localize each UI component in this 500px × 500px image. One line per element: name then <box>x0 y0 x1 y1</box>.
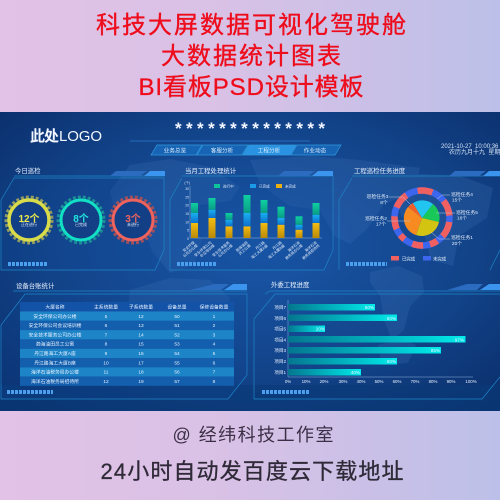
data table: 2 <box>213 323 216 329</box>
category labels: 员工公寓 <box>237 243 252 256</box>
legend <box>214 184 296 188</box>
data table: 10 <box>103 360 109 366</box>
pie callouts: 巡检任务1 <box>451 234 473 241</box>
panel: inspection task progress <box>339 166 500 270</box>
nav tabs <box>151 145 341 155</box>
logo <box>30 127 102 145</box>
gauge: in progress <box>6 197 52 243</box>
category labels: 税务局办公楼 <box>284 243 304 261</box>
download note: 24小时自动发百度云下载地址 <box>100 459 404 484</box>
horizontal bar chart: 60% <box>387 316 396 321</box>
horizontal bar chart: 97% <box>455 337 464 342</box>
stacked bar chart: 30 <box>185 187 189 191</box>
data table: 56 <box>174 370 180 376</box>
donut ring <box>394 190 450 246</box>
category labels: 海洋石油 <box>286 240 301 253</box>
data table: 51 <box>174 323 180 329</box>
world map <box>110 156 493 365</box>
stacked bar chart: 0 <box>187 237 189 241</box>
data table: 主系统数量 <box>94 304 118 310</box>
pie chart <box>404 200 440 236</box>
donut legend <box>391 256 447 262</box>
gauge: not started: 3个 <box>125 213 141 225</box>
horizontal bar chart: 项目7 <box>274 305 286 311</box>
data table: 55 <box>174 360 180 366</box>
horizontal bar chart: 50% <box>375 379 383 384</box>
pie callouts: 巡检任务4 <box>451 191 473 198</box>
studio credit: @ 经纬科技工作室 <box>172 425 334 445</box>
horizontal bar chart: 项目3 <box>274 348 286 354</box>
logo: 此处 <box>30 127 59 145</box>
dashboard panel <box>0 112 500 411</box>
data table: 16 <box>138 351 144 357</box>
data table: 保修设备数量 <box>200 304 229 310</box>
data table: 丹江路海工大厦A座 <box>34 350 76 357</box>
category labels: 安全环保 <box>181 240 196 253</box>
category labels: 海工大厦B座 <box>267 243 286 260</box>
data table: 设备总量 <box>167 304 187 310</box>
data table: 12 <box>138 314 144 320</box>
nav tabs: 客服分析 <box>211 146 234 154</box>
data table: 17 <box>138 360 144 366</box>
stacked bar chart: 15 <box>185 212 189 216</box>
horizontal bar chart: 60% <box>393 379 401 384</box>
pie callouts: 巡检任务2 <box>365 215 387 222</box>
gauge: not started: 未进行 <box>127 221 139 227</box>
stacked bar chart: 5 <box>187 229 189 233</box>
data table: 海洋石油税务局招待所 <box>31 378 79 385</box>
data table: 4 <box>213 342 216 348</box>
data table: 渤海油田员工公寓 <box>36 341 74 348</box>
horizontal bar chart: 10% <box>302 379 310 384</box>
pie callouts: 15个 <box>452 198 462 204</box>
data table: 7 <box>213 370 216 376</box>
header rule <box>130 140 310 142</box>
horizontal bar chart: 50% <box>365 305 374 310</box>
donut legend: 已完成 <box>402 256 416 262</box>
data table: 6 <box>105 323 108 329</box>
horizontal bar chart: 85% <box>431 348 440 353</box>
date and time: 2021-10-27 10:00:36 <box>441 144 499 150</box>
horizontal bar chart: 60% <box>387 359 396 364</box>
data table: 50 <box>174 314 180 320</box>
data table: 13 <box>138 323 144 329</box>
horizontal bar chart: 70% <box>411 379 419 384</box>
data table: 9 <box>105 351 108 357</box>
data table: 8 <box>105 342 108 348</box>
horizontal bar chart: 项目2 <box>274 359 286 365</box>
title: 大数据统计图表 <box>161 43 341 70</box>
legend: 进行中 <box>223 184 234 188</box>
data table: 安全环保公司会议培训楼 <box>29 322 82 329</box>
horizontal bar chart: 项目6 <box>274 316 286 322</box>
data table: 安全环保公司办公楼 <box>33 313 77 320</box>
stacked bar chart: 25 <box>185 195 189 199</box>
category labels: 丹江路 <box>271 240 283 251</box>
title: BI看板PSD设计模板 <box>138 74 364 101</box>
donut legend: 未完成 <box>433 256 447 262</box>
horizontal bar chart: 40% <box>357 379 365 384</box>
data table: 12 <box>103 379 109 385</box>
data table: 5 <box>213 351 216 357</box>
data table: 7 <box>105 332 108 338</box>
data table: 18 <box>138 370 144 376</box>
heading: 设备台账统计 <box>16 281 55 290</box>
pie callouts: 17个 <box>376 222 386 228</box>
title: 科技大屏数据可视化驾驶舱 <box>96 12 406 39</box>
pie callouts: 巡检任务5 <box>456 209 478 216</box>
category labels: 海工大厦A座 <box>250 243 269 260</box>
category labels: 税务局招待所 <box>301 243 321 261</box>
gauge: not started <box>110 197 156 243</box>
horizontal bar chart: 项目5 <box>274 326 286 332</box>
stacked bar chart: 10 <box>185 220 189 224</box>
category labels: 公司办公楼 <box>217 243 234 258</box>
main heading asterisks: ************** <box>175 119 325 138</box>
horizontal bar chart: 20% <box>320 379 328 384</box>
category labels: 安全环保公司 <box>193 240 213 258</box>
gauge: completed: 已完成 <box>75 221 87 227</box>
gauge: in progress: 正在进行 <box>21 221 37 227</box>
horizontal bar chart: 100% <box>465 379 477 384</box>
data table: 3 <box>213 332 216 338</box>
horizontal bar chart: 30% <box>339 379 347 384</box>
pie callouts: 16个 <box>457 216 467 222</box>
data table: 52 <box>174 332 180 338</box>
horizontal bar chart: 40% <box>351 370 360 375</box>
panel: today's inspection <box>1 166 165 270</box>
heading: 今日巡检 <box>15 166 41 175</box>
data table: 57 <box>174 379 180 385</box>
data table: 安全技术服务公司办公楼 <box>29 331 82 338</box>
horizontal bar chart: 项目1 <box>274 370 286 376</box>
stacked bar chart <box>181 180 322 261</box>
legend: 已完成 <box>259 184 270 188</box>
heading: 工程巡检任务进度 <box>354 166 406 175</box>
pie callouts: 8个 <box>380 200 388 206</box>
data table: 14 <box>138 332 144 338</box>
category labels: 海洋石油 <box>303 240 318 253</box>
horizontal bar chart: 80% <box>429 379 437 384</box>
panel: monthly engineering <box>170 166 333 270</box>
panel: outsourced project progress <box>254 280 500 399</box>
panel: equipment ledger <box>1 281 247 399</box>
heading: 外委工程进度 <box>271 280 310 289</box>
heading: 当月工程处理统计 <box>185 166 237 175</box>
nav tabs: 工程分析 <box>258 146 281 154</box>
category labels <box>181 240 321 261</box>
data table <box>20 302 234 386</box>
gauge: completed <box>58 197 104 243</box>
category labels: 会议培训楼 <box>199 243 216 258</box>
category labels: 公司办公楼 <box>182 243 199 258</box>
data table: 11 <box>104 370 109 376</box>
data table: 8 <box>213 379 216 385</box>
data table: 54 <box>174 351 180 357</box>
pie callouts: 20个 <box>452 241 462 247</box>
horizontal bar chart: 90% <box>447 379 455 384</box>
data table: 子系统数量 <box>129 304 153 310</box>
pie callouts: 巡检任务3 <box>367 193 389 200</box>
data table: 海洋石油税务局办公楼 <box>31 369 79 376</box>
horizontal bar chart: 项目4 <box>274 337 286 343</box>
category labels: 丹江路 <box>254 240 266 251</box>
data table: 15 <box>138 342 144 348</box>
data table: 5 <box>105 314 108 320</box>
stacked bar chart: (个) <box>184 180 190 185</box>
data table: 大厦名称 <box>45 304 65 310</box>
data table: 1 <box>213 314 216 320</box>
stacked bar chart: 20 <box>185 204 189 208</box>
horizontal bar chart <box>274 300 477 384</box>
data table: 丹江路海工大厦B座 <box>34 359 76 366</box>
nav tabs: 作业动态 <box>304 146 327 154</box>
category labels: 安全技术服务 <box>211 240 231 258</box>
horizontal bar chart: 20% <box>316 326 325 332</box>
legend: 未完成 <box>285 184 296 188</box>
pie callouts <box>365 191 478 247</box>
data table: 19 <box>138 379 144 385</box>
nav tabs: 业务总览 <box>164 146 187 154</box>
gauge: in progress: 12个 <box>18 213 40 225</box>
stripes <box>8 262 48 266</box>
category labels: 渤海油田 <box>234 240 249 253</box>
data table: 53 <box>174 342 180 348</box>
data table: 6 <box>213 360 216 366</box>
horizontal bar chart: 0% <box>285 379 291 384</box>
gauge: completed: 8个 <box>73 213 89 225</box>
date and time <box>441 144 500 156</box>
logo: LOGO <box>59 128 102 145</box>
title <box>96 12 406 101</box>
